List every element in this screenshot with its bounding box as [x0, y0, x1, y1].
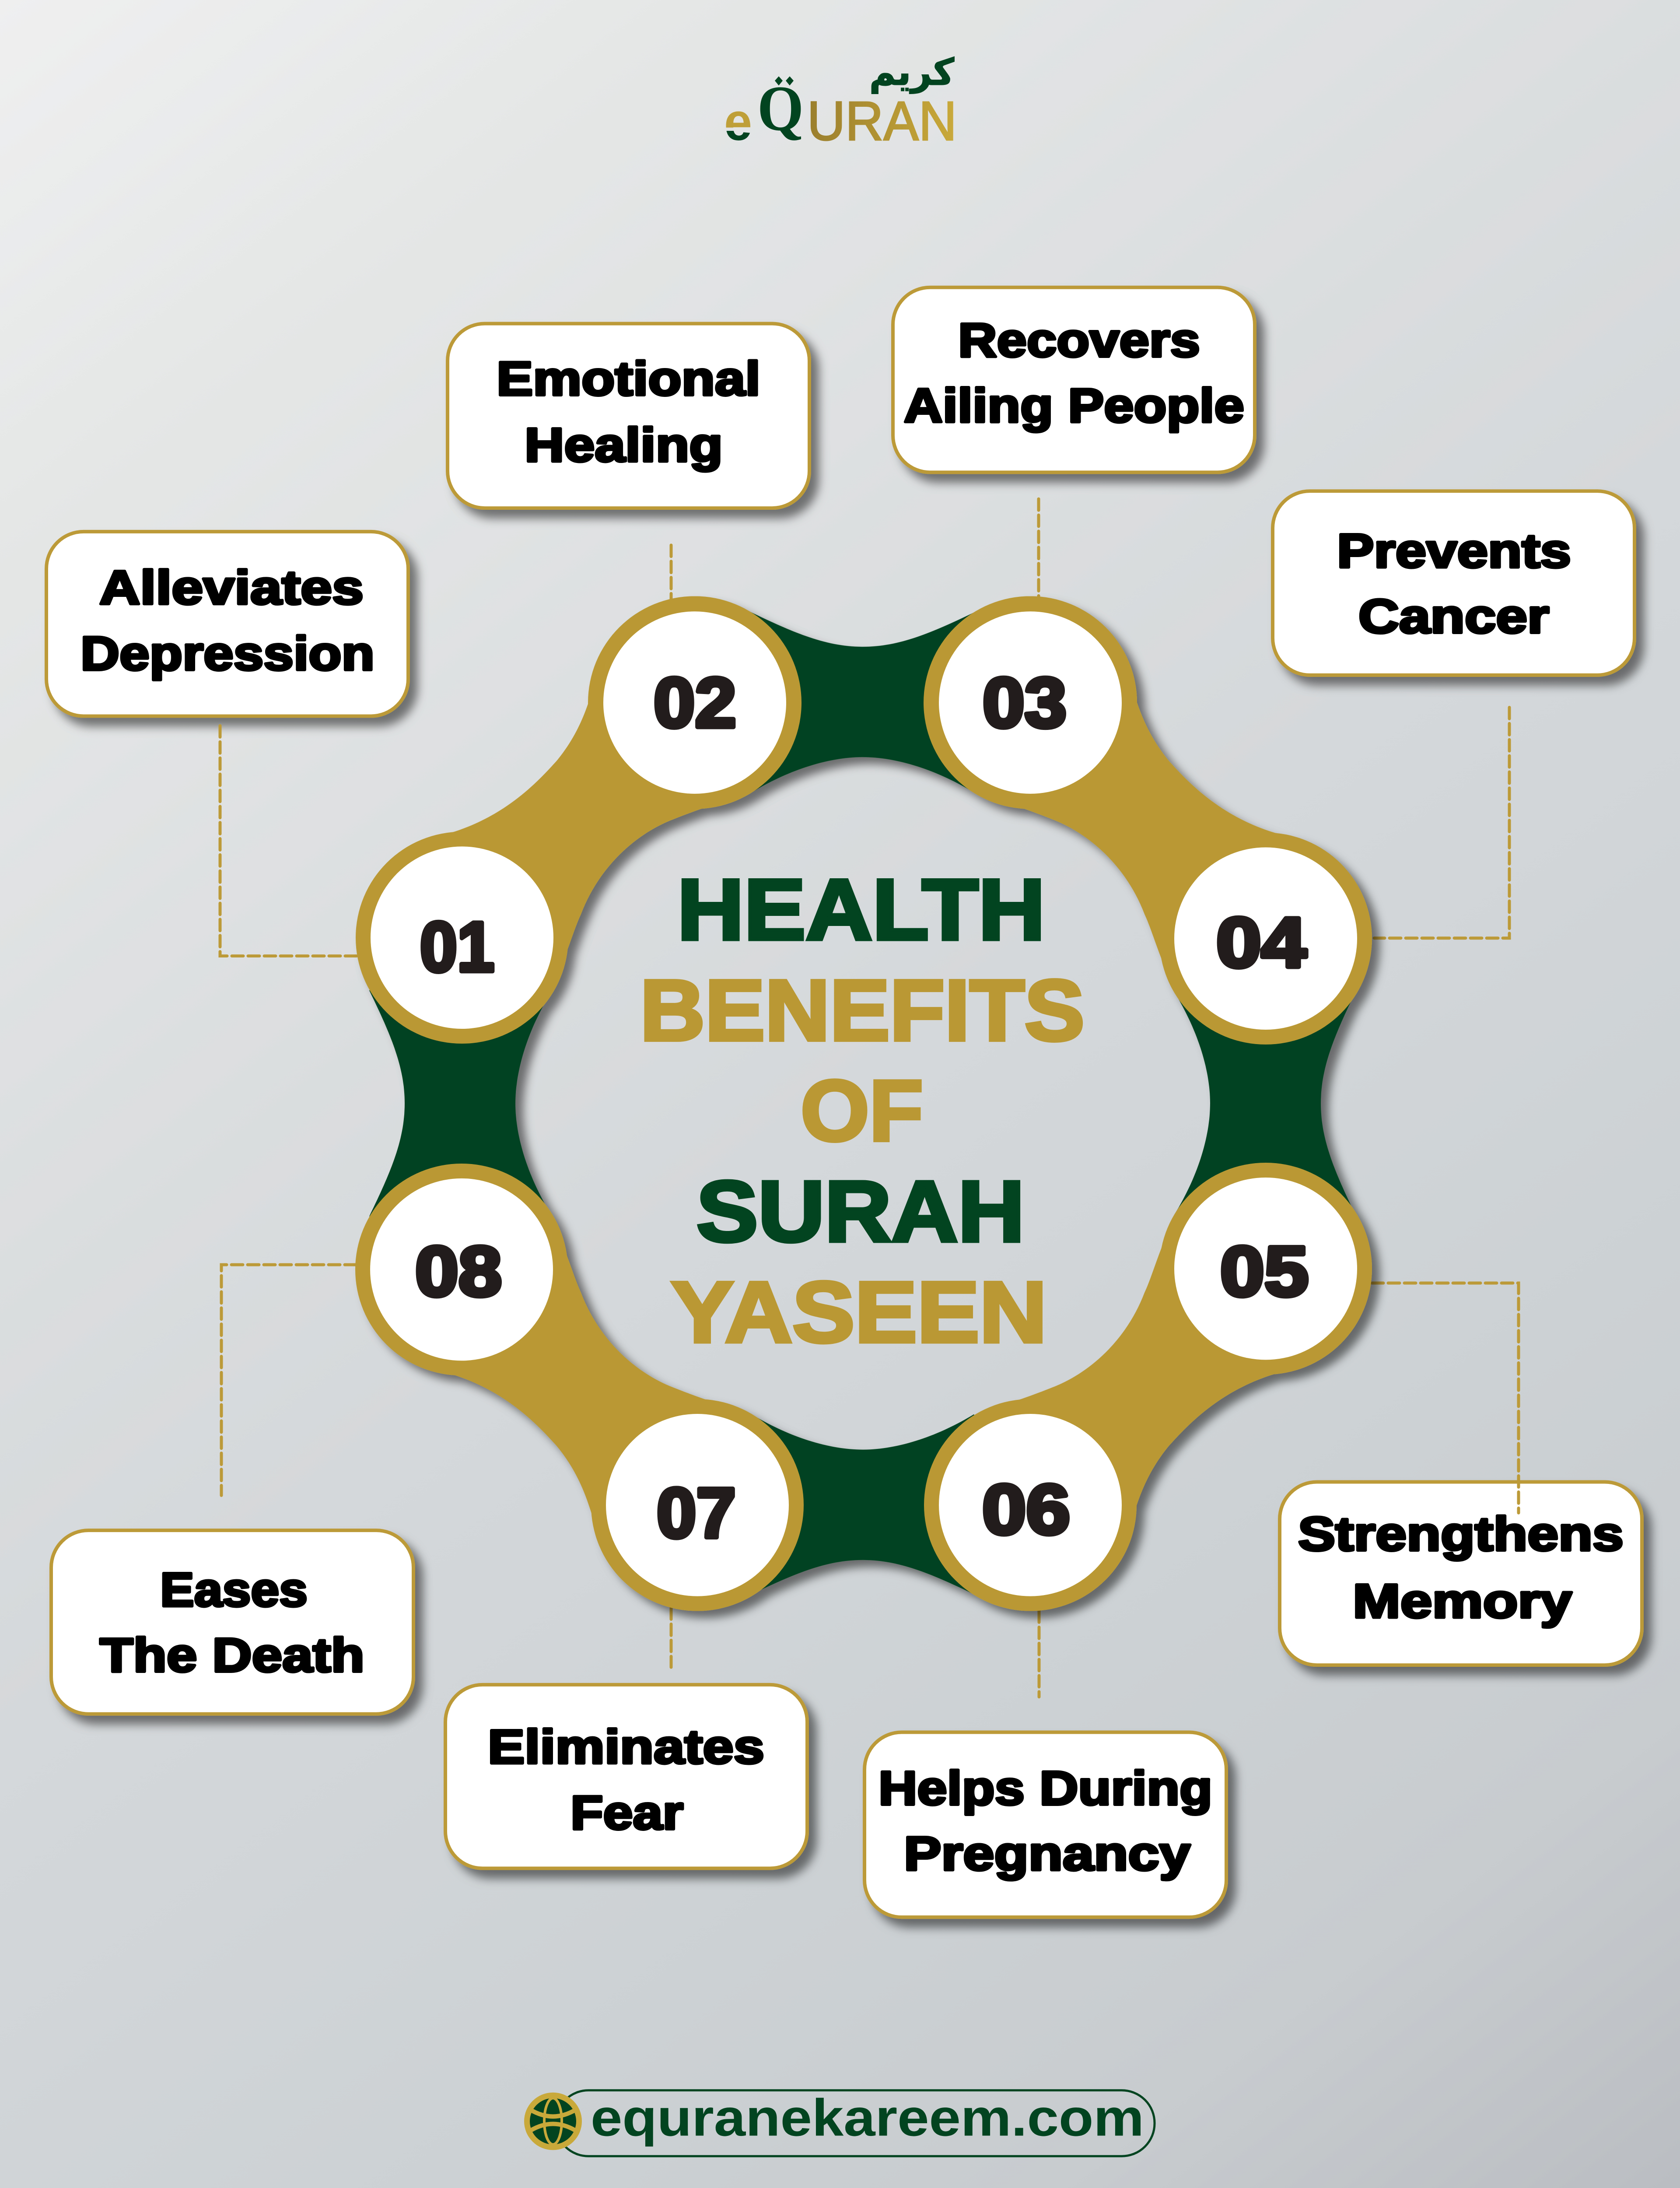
label: Helps During Pregnancy	[864, 1732, 1226, 1917]
node 08: 08	[415, 1232, 502, 1311]
title line BENEFITS: BENEFITS	[640, 962, 1085, 1059]
green connector 02-03	[695, 611, 1031, 792]
label text 06 line 2: Pregnancy	[904, 1827, 1190, 1880]
logo letter e: e	[724, 92, 752, 151]
title line SURAH: SURAH	[696, 1163, 1025, 1259]
label box 01	[46, 532, 408, 716]
label: Eases The Death	[51, 1530, 413, 1714]
node 08	[355, 1164, 568, 1375]
dashed connector 01	[220, 726, 357, 956]
logo letters URAN: URAN	[807, 90, 957, 152]
label box 08	[51, 1530, 413, 1714]
node 03	[924, 596, 1137, 809]
label box 05	[1280, 1482, 1642, 1665]
dashed connector 02	[669, 545, 673, 600]
label text 08 line 2: The Death	[100, 1629, 364, 1682]
logo: eQuran Kareem	[724, 50, 957, 152]
logo arabic word: كريم	[869, 50, 954, 94]
dashed connector 03	[1037, 499, 1040, 597]
node 04: 04	[1216, 904, 1306, 982]
label text 04 line 2: Cancer	[1358, 590, 1549, 643]
node 01	[356, 832, 568, 1044]
label: Eliminates Fear	[445, 1685, 807, 1868]
label text 02 line 1: Emotional	[497, 352, 760, 406]
title line HEALTH: HEALTH	[677, 861, 1045, 958]
label text 03 line 1: Recovers	[958, 314, 1200, 367]
label text 06 line 1: Helps During	[878, 1762, 1212, 1815]
title: Health Benefits of Surah Yaseen	[640, 861, 1085, 1360]
node 02: 02	[654, 664, 736, 742]
node 07	[591, 1399, 804, 1611]
node 02	[588, 596, 802, 809]
node 03: 03	[983, 664, 1067, 742]
gold connector 01-02	[447, 655, 742, 977]
label text 05 line 2: Memory	[1353, 1575, 1572, 1628]
node 01: 01	[420, 908, 494, 986]
dashed connector 06	[1038, 1611, 1040, 1697]
label text 01 line 2: Depression	[80, 627, 374, 680]
ring connectors	[369, 611, 1356, 1595]
label text 02 line 2: Healing	[525, 419, 723, 472]
label box 07	[445, 1685, 807, 1868]
label box 04	[1273, 491, 1634, 675]
website url: equranekareem.com	[591, 2089, 1144, 2147]
node 07: 07	[657, 1474, 736, 1553]
node 06	[924, 1399, 1137, 1611]
green connector 04-05	[1175, 936, 1356, 1271]
label: Recovers Ailing People	[893, 288, 1255, 472]
label: Strengthens Memory	[1280, 1482, 1642, 1665]
ring diagram	[355, 596, 1372, 1611]
footer website pill	[524, 2089, 1155, 2156]
label: Emotional Healing	[448, 323, 809, 508]
label text 03 line 2: Ailing People	[904, 379, 1244, 433]
green connector 06-07	[695, 1414, 1031, 1595]
gold connector 07-08	[447, 1230, 742, 1552]
title line OF: OF	[801, 1062, 923, 1159]
dashed connector 08	[221, 1265, 356, 1495]
logo letter Q: Q	[757, 72, 804, 144]
label text 07 line 2: Fear	[570, 1786, 683, 1840]
title line YASEEN: YASEEN	[671, 1264, 1047, 1360]
logo diamonds and hook	[775, 76, 794, 85]
label text 05 line 1: Strengthens	[1298, 1508, 1624, 1561]
label box 02	[448, 323, 809, 508]
node 05: 05	[1220, 1232, 1309, 1311]
label text 01 line 1: Alleviates	[99, 561, 364, 614]
label: Alleviates Depression	[46, 532, 408, 716]
icon: globe	[524, 2093, 582, 2150]
label text 04 line 1: Prevents	[1337, 525, 1571, 578]
dashed connector 05	[1372, 1283, 1519, 1513]
node 06: 06	[982, 1470, 1070, 1549]
node 04	[1159, 833, 1372, 1045]
dashed connector 04	[1374, 708, 1509, 938]
pill outline	[556, 2090, 1155, 2156]
label box 03	[893, 288, 1255, 472]
label text 08 line 1: Eases	[160, 1564, 308, 1616]
gold connector 05-06	[983, 1230, 1278, 1552]
dashed connector 07	[669, 1608, 673, 1667]
gold connector 03-04	[983, 655, 1278, 977]
green connector 08-01	[369, 936, 551, 1271]
node 05	[1159, 1163, 1372, 1375]
label text 07 line 1: Eliminates	[488, 1720, 764, 1774]
label box 06	[864, 1732, 1226, 1917]
label: Prevents Cancer	[1273, 491, 1634, 675]
